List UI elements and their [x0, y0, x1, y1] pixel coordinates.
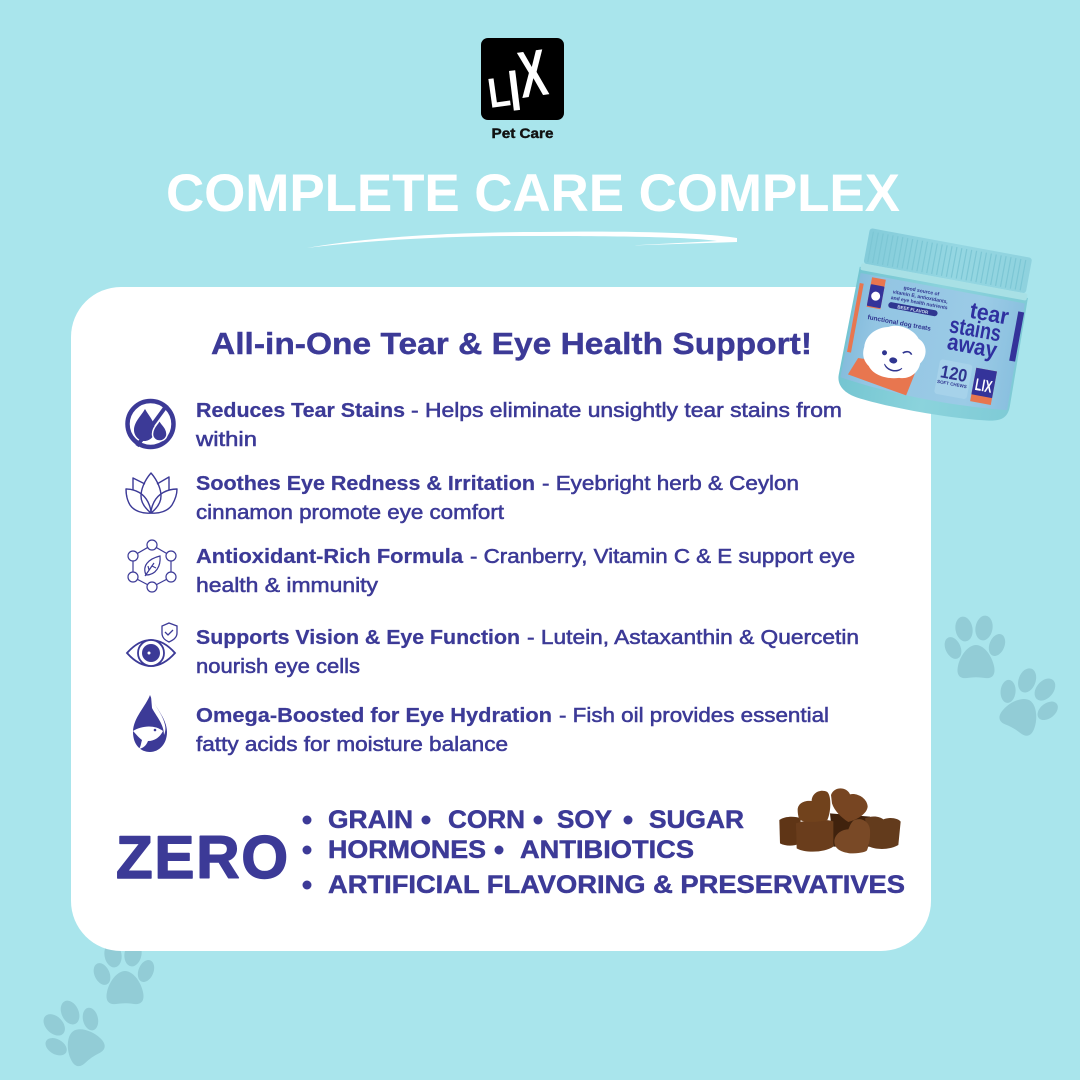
jar brand tag	[867, 277, 886, 309]
text: reduces tear stains: within	[195, 428, 257, 451]
icon: no tear drops	[128, 401, 174, 447]
jar base	[835, 267, 1030, 428]
text: supports vision: nourish eye cells	[196, 655, 360, 678]
logo: LIX Pet Care	[481, 35, 564, 141]
jar LIX logo	[970, 368, 997, 405]
logo: LIX Pet Care: Pet Care	[492, 125, 554, 141]
jar product name: away	[945, 328, 999, 363]
jar claim text: and eye health nutrients	[890, 295, 948, 311]
jar claim text: vitamin E, antioxidants,	[892, 289, 949, 305]
text: soothes eye redness: - Eyebright herb & Ceylon	[542, 472, 799, 495]
jar claim text: BEEF FLAVOR	[897, 304, 929, 315]
jar left side label	[847, 283, 864, 353]
text: antioxidant-rich formula: - Cranberry, Vitamin C & E support eye	[470, 545, 855, 568]
image: product jar tear stains away	[835, 227, 1037, 428]
jar label	[839, 273, 1027, 414]
list: zero ingredients: ARTIFICIAL FLAVORING & PRESERVATIVES	[328, 871, 905, 899]
text: antioxidant-rich formula: Antioxidant-Rich Formula	[196, 545, 464, 568]
jar side panel	[1009, 311, 1024, 362]
list: zero ingredients: GRAIN	[328, 806, 413, 834]
text: supports vision	[196, 626, 859, 678]
text: reduces tear stains: Reduces Tear Stains	[196, 399, 405, 422]
text: antioxidant-rich formula	[196, 545, 855, 597]
jar product name	[944, 294, 1011, 364]
image: heart-shaped soft chews	[779, 788, 901, 853]
list: zero ingredients: ANTIBIOTICS	[520, 836, 694, 864]
heading: All-in-One Tear & Eye Health Support!	[211, 327, 812, 361]
icon: lotus	[126, 473, 177, 513]
text: omega-boosted: fatty acids for moisture balance	[196, 733, 508, 756]
list: zero ingredients	[302, 806, 905, 899]
text: soothes eye redness: cinnamon promote eye comfort	[196, 501, 504, 524]
text: soothes eye redness: Soothes Eye Redness & Irritation	[196, 472, 535, 495]
jar count badge: 120	[939, 361, 969, 386]
jar claim text	[867, 280, 950, 335]
title underline swoosh	[307, 232, 737, 248]
decoration: paw prints right	[941, 614, 1073, 745]
panel: benefits card	[71, 287, 931, 951]
list: zero ingredients: CORN	[448, 806, 525, 834]
list: zero ingredients: SOY	[557, 806, 612, 834]
text: omega-boosted: - Fish oil provides essential	[559, 704, 829, 727]
title: COMPLETE CARE COMPLEX	[166, 164, 900, 223]
list: zero ingredients: SUGAR	[649, 806, 744, 834]
text: reduces tear stains	[195, 399, 842, 451]
jar dog illustration	[846, 318, 929, 397]
text: soothes eye redness	[196, 472, 799, 524]
list: zero ingredients: HORMONES	[328, 836, 486, 864]
text: reduces tear stains: - Helps eliminate unsightly tear stains from	[411, 399, 842, 422]
text: antioxidant-rich formula: health & immunity	[196, 574, 379, 597]
icon: fish oil drop	[133, 695, 167, 752]
jar claim text: functional dog treats	[867, 314, 932, 333]
jar count badge	[934, 359, 973, 399]
jar LIX logo: LIX	[974, 375, 994, 397]
text: supports vision: - Lutein, Astaxanthin & Quercetin	[527, 626, 859, 649]
jar product name: tear	[968, 297, 1011, 330]
logo: LIX Pet Care: X	[514, 35, 552, 112]
jar count badge: SOFT CHEWS	[937, 379, 967, 389]
icon: antioxidant network leaf	[128, 540, 176, 592]
logo: LIX Pet Care: L	[485, 67, 513, 117]
icon: eye with shield	[127, 623, 177, 666]
text: supports vision: Supports Vision & Eye Function	[196, 626, 520, 649]
jar product name: stains	[947, 311, 1003, 346]
text: omega-boosted	[196, 704, 829, 756]
decoration: paw prints bottom left	[27, 940, 157, 1078]
jar lid	[860, 228, 1034, 301]
text: omega-boosted: Omega-Boosted for Eye Hydration	[196, 704, 552, 727]
jar claim text: good source of	[903, 285, 940, 298]
logo: LIX Pet Care: I	[505, 58, 524, 124]
heading: ZERO: ZERO	[116, 824, 288, 891]
